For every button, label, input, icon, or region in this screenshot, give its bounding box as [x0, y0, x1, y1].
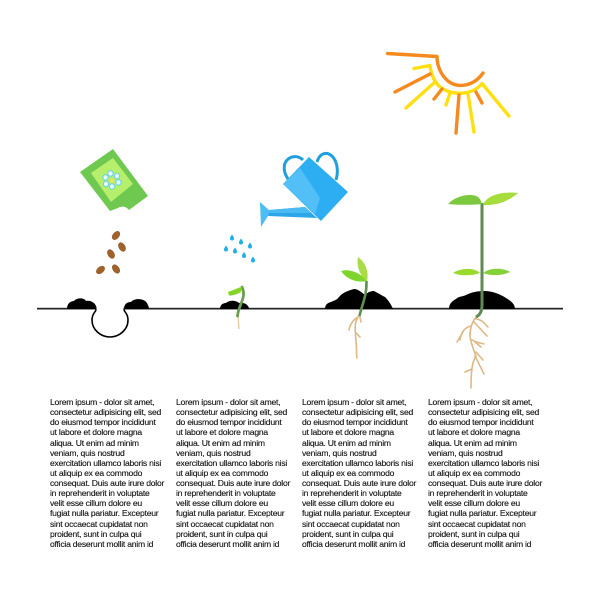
text block: step 3: proident, sunt in culpa qui	[302, 529, 393, 539]
text block: step 4: velit esse cillum dolore eu	[428, 498, 520, 508]
text block: step 1: in reprehenderit in voluptate	[50, 488, 150, 498]
text block: step 2: veniam, quis nostrud	[176, 448, 250, 458]
text block: step 1: consequat. Duis aute irure dolor	[50, 478, 164, 488]
text block: step 1: do eiusmod tempor incididunt	[50, 417, 156, 427]
text block: step 1: ut labore et dolore magna	[50, 427, 142, 437]
text block: step 2: consequat. Duis aute irure dolor	[176, 478, 290, 488]
text block: step 4: ut aliquip ex ea commodo	[428, 468, 520, 478]
text block: step 2: in reprehenderit in voluptate	[176, 488, 276, 498]
text block: step 3: ut labore et dolore magna	[302, 427, 394, 437]
text block: step 2: fugiat nulla pariatur. Excepteur	[176, 508, 284, 518]
text block: step 2: do eiusmod tempor incididunt	[176, 417, 282, 427]
text block: step 3: officia deserunt mollit anim id	[302, 539, 405, 549]
stage 4: mature plant	[448, 193, 518, 388]
text block: step 4: Lorem ipsum - dolor sit amet,	[428, 397, 532, 407]
text block: step 1: aliqua. Ut enim ad minim	[50, 438, 139, 448]
text block: step 2: officia deserunt mollit anim id	[176, 539, 279, 549]
text block: step 1: fugiat nulla pariatur. Excepteur	[50, 508, 158, 518]
text block: step 3: exercitation ullamco laboris nisi	[302, 458, 413, 468]
icon: falling seeds	[95, 230, 127, 275]
text block: step 1: Lorem ipsum - dolor sit amet,	[50, 397, 154, 407]
text block: step 1: sint occaecat cupidatat non	[50, 518, 148, 528]
text block: step 1: proident, sunt in culpa qui	[50, 529, 141, 539]
text block: step 2: consectetur adipisicing elit, sed	[176, 407, 287, 417]
text block: step 4: fugiat nulla pariatur. Excepteur	[428, 508, 536, 518]
text block: step 3: veniam, quis nostrud	[302, 448, 376, 458]
text block: step 4: veniam, quis nostrud	[428, 448, 502, 458]
text block: step 4: officia deserunt mollit anim id	[428, 539, 531, 549]
icon: sun	[388, 54, 509, 133]
text block: step 1: officia deserunt mollit anim id	[50, 539, 153, 549]
text block: step 1: velit esse cillum dolore eu	[50, 498, 142, 508]
text block: step 3: velit esse cillum dolore eu	[302, 498, 394, 508]
text block: step 4: do eiusmod tempor incididunt	[428, 417, 534, 427]
text block: step 4: ut labore et dolore magna	[428, 427, 520, 437]
text block: step 4: sint occaecat cupidatat non	[428, 518, 526, 528]
text block: step 3: fugiat nulla pariatur. Excepteur	[302, 508, 410, 518]
text block: step 3: Lorem ipsum - dolor sit amet,	[302, 397, 406, 407]
text block: step 3: do eiusmod tempor incididunt	[302, 417, 408, 427]
text block: step 3: consequat. Duis aute irure dolor	[302, 478, 416, 488]
text block: step 3: aliqua. Ut enim ad minim	[302, 438, 391, 448]
text block: step 2: ut labore et dolore magna	[176, 427, 268, 437]
text block: step 4: proident, sunt in culpa qui	[428, 529, 519, 539]
icon: watering can	[260, 153, 348, 227]
text block: step 2: proident, sunt in culpa qui	[176, 529, 267, 539]
text block: step 4: consectetur adipisicing elit, sed	[428, 407, 539, 417]
text block: step 1: consectetur adipisicing elit, sed	[50, 407, 161, 417]
text block: step 1: exercitation ullamco laboris nisi	[50, 458, 161, 468]
text block: step 2: sint occaecat cupidatat non	[176, 518, 274, 528]
stage 3: young plant	[325, 257, 393, 358]
text block: step 3: in reprehenderit in voluptate	[302, 488, 402, 498]
text block: step 3	[302, 397, 416, 549]
text block: step 2: velit esse cillum dolore eu	[176, 498, 268, 508]
text block: step 1	[50, 397, 164, 549]
text block: step 4: consequat. Duis aute irure dolor	[428, 478, 542, 488]
text block: step 2: Lorem ipsum - dolor sit amet,	[176, 397, 280, 407]
text block: step 1: veniam, quis nostrud	[50, 448, 124, 458]
ground line	[37, 308, 563, 310]
stage 1: planting hole with soil	[67, 298, 149, 337]
text block: step 2: ut aliquip ex ea commodo	[176, 468, 268, 478]
text block: step 3: ut aliquip ex ea commodo	[302, 468, 394, 478]
text block: step 2: aliqua. Ut enim ad minim	[176, 438, 265, 448]
text block: step 2	[176, 397, 290, 549]
icon: seed packet	[80, 149, 148, 211]
text block: step 4: exercitation ullamco laboris nisi	[428, 458, 539, 468]
text block: step 3: consectetur adipisicing elit, sed	[302, 407, 413, 417]
text block: step 4: aliqua. Ut enim ad minim	[428, 438, 517, 448]
icon: water drops	[224, 234, 255, 262]
text block: step 1: ut aliquip ex ea commodo	[50, 468, 142, 478]
text block: step 4	[428, 397, 542, 549]
text block: step 4: in reprehenderit in voluptate	[428, 488, 528, 498]
text block: step 3: sint occaecat cupidatat non	[302, 518, 400, 528]
stage 2: sprout	[220, 286, 249, 329]
text block: step 2: exercitation ullamco laboris nisi	[176, 458, 287, 468]
